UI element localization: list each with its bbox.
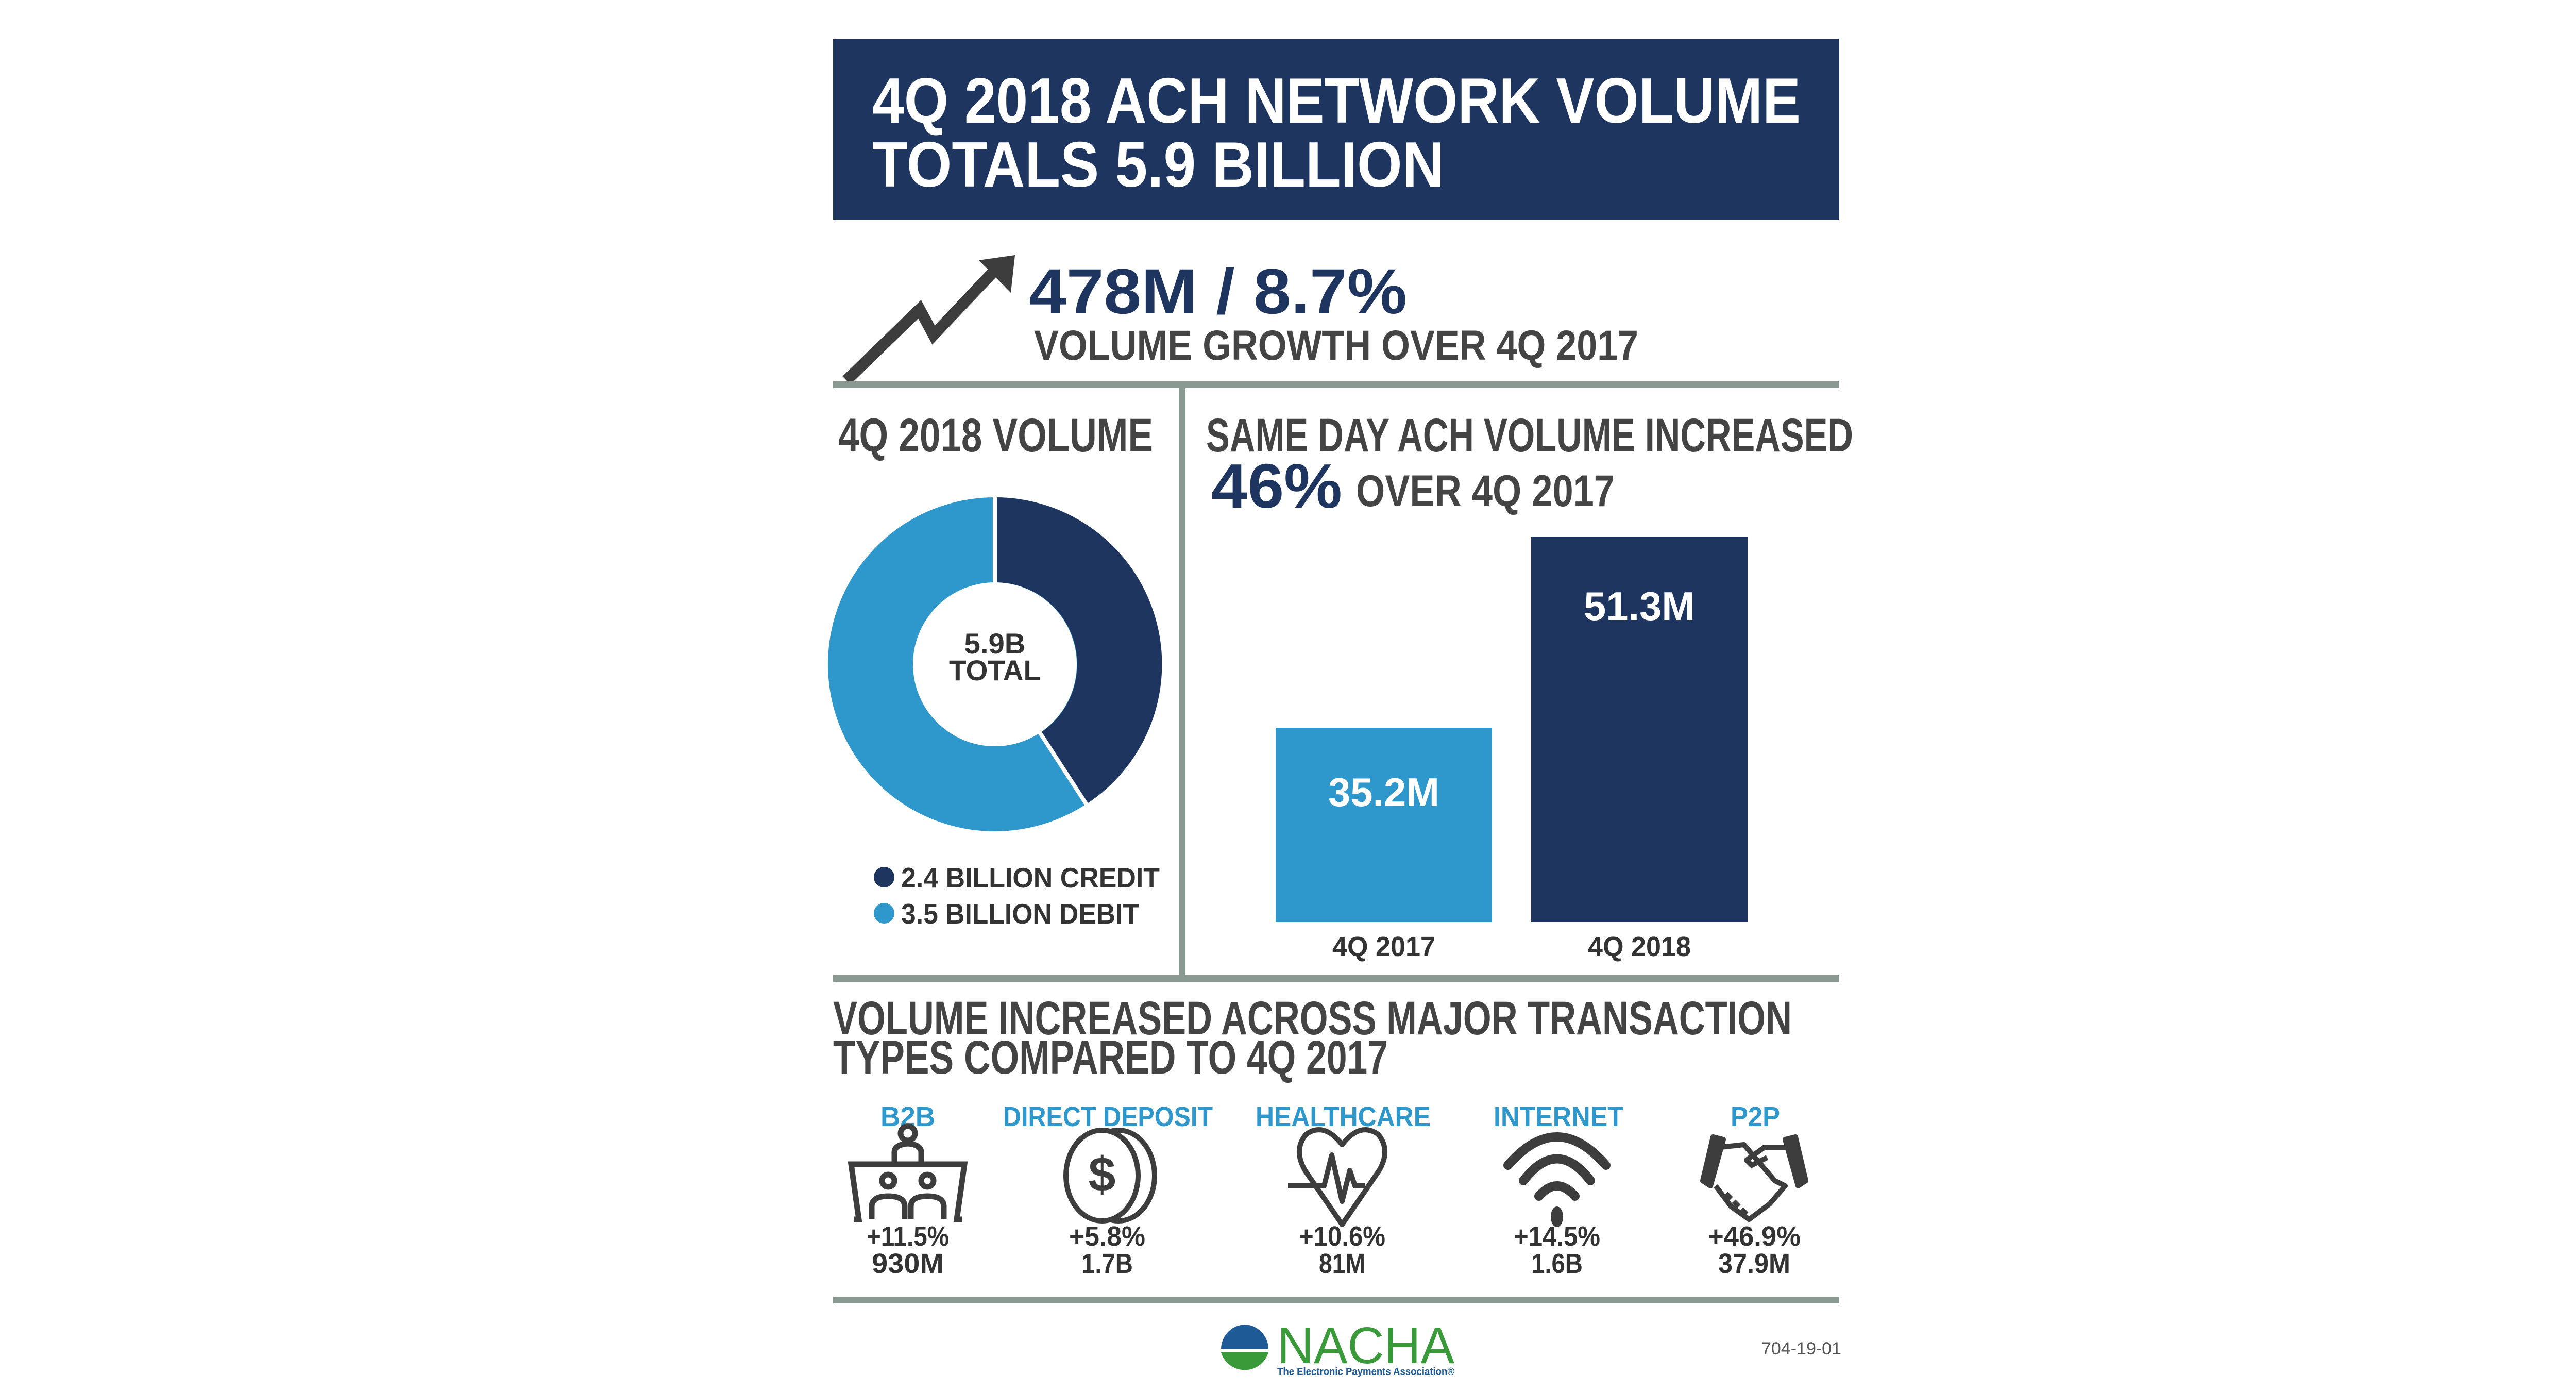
panel: direct deposit: DIRECT DEPOSIT (1003, 1101, 1213, 1132)
panel: internet: 1.6B (1531, 1248, 1583, 1279)
donut chart (871, 496, 1162, 806)
panel: B2B: +11.5% (867, 1221, 949, 1252)
icon: growth arrow (846, 255, 1015, 380)
donut chart: 5.9B (964, 627, 1025, 660)
bar chart (1276, 537, 1748, 962)
panel: B2B (851, 1101, 964, 1279)
panel: healthcare: +10.6% (1299, 1221, 1385, 1252)
panel: B2B: 930M (872, 1248, 944, 1279)
icon: handshake (1703, 1137, 1806, 1219)
title banner (833, 39, 1839, 220)
heading: transaction types: VOLUME INCREASED ACROSS MAJOR TRANSACTION (833, 992, 1792, 1045)
legend: 2.4 BILLION CREDIT (901, 862, 1160, 894)
heading: 4Q 2018 volume: 4Q 2018 VOLUME (838, 409, 1153, 462)
panel: same day ACH bar chart (1206, 409, 1853, 962)
bar chart: 4Q 2017 (1332, 931, 1435, 962)
panel: healthcare (1256, 1101, 1431, 1279)
title banner: 4Q 2018 ACH NETWORK VOLUME (872, 65, 1801, 137)
bar chart: 4Q 2018 (1588, 931, 1691, 962)
logo: NACHA: The Electronic Payments Association® (1277, 1366, 1454, 1378)
panel: healthcare: HEALTHCARE (1256, 1101, 1431, 1132)
panel: P2P: 37.9M (1718, 1248, 1790, 1279)
panel: 4Q 2018 volume donut (838, 409, 1162, 930)
icon: coins (1066, 1130, 1155, 1221)
panel: B2B: B2B (880, 1101, 935, 1132)
panel: internet: +14.5% (1514, 1221, 1600, 1252)
code: 704-19-01: 704-19-01 (1761, 1339, 1841, 1359)
growth headline (1029, 256, 1638, 369)
growth headline: 478M / 8.7% (1029, 256, 1407, 327)
logo: NACHA: NACHA (1277, 1317, 1454, 1375)
heading: transaction types (833, 992, 1792, 1084)
panel: direct deposit: 1.7B (1081, 1248, 1133, 1279)
bar chart: 35.2M (1328, 769, 1439, 815)
panel: internet (1494, 1101, 1623, 1279)
heading: transaction types: TYPES COMPARED TO 4Q 2017 (833, 1031, 1388, 1084)
panel: healthcare: 81M (1319, 1248, 1365, 1279)
title banner: TOTALS 5.9 BILLION (872, 129, 1444, 200)
legend (874, 862, 1160, 930)
panel: P2P (1703, 1101, 1806, 1279)
legend: 3.5 BILLION DEBIT (901, 898, 1139, 930)
panel: P2P: P2P (1731, 1101, 1780, 1132)
growth headline: VOLUME GROWTH OVER 4Q 2017 (1034, 322, 1638, 369)
icon: wifi (1508, 1137, 1606, 1227)
panel: direct deposit: +5.8% (1069, 1221, 1145, 1252)
panel: direct deposit (1003, 1101, 1213, 1279)
icon: meeting table (851, 1126, 964, 1219)
highlight: 46%: 46% (1211, 451, 1342, 521)
bar chart: 51.3M (1584, 583, 1695, 629)
panel: same day ACH bar chart: OVER 4Q 2017 (1356, 466, 1615, 516)
donut chart: TOTAL (949, 654, 1041, 686)
icon: heart with pulse (1288, 1130, 1385, 1225)
icon: coins: $ (1089, 1147, 1115, 1202)
panel: P2P: +46.9% (1708, 1221, 1801, 1252)
panel: internet: INTERNET (1494, 1101, 1623, 1132)
heading: same day ACH: SAME DAY ACH VOLUME INCREASED (1206, 409, 1853, 462)
